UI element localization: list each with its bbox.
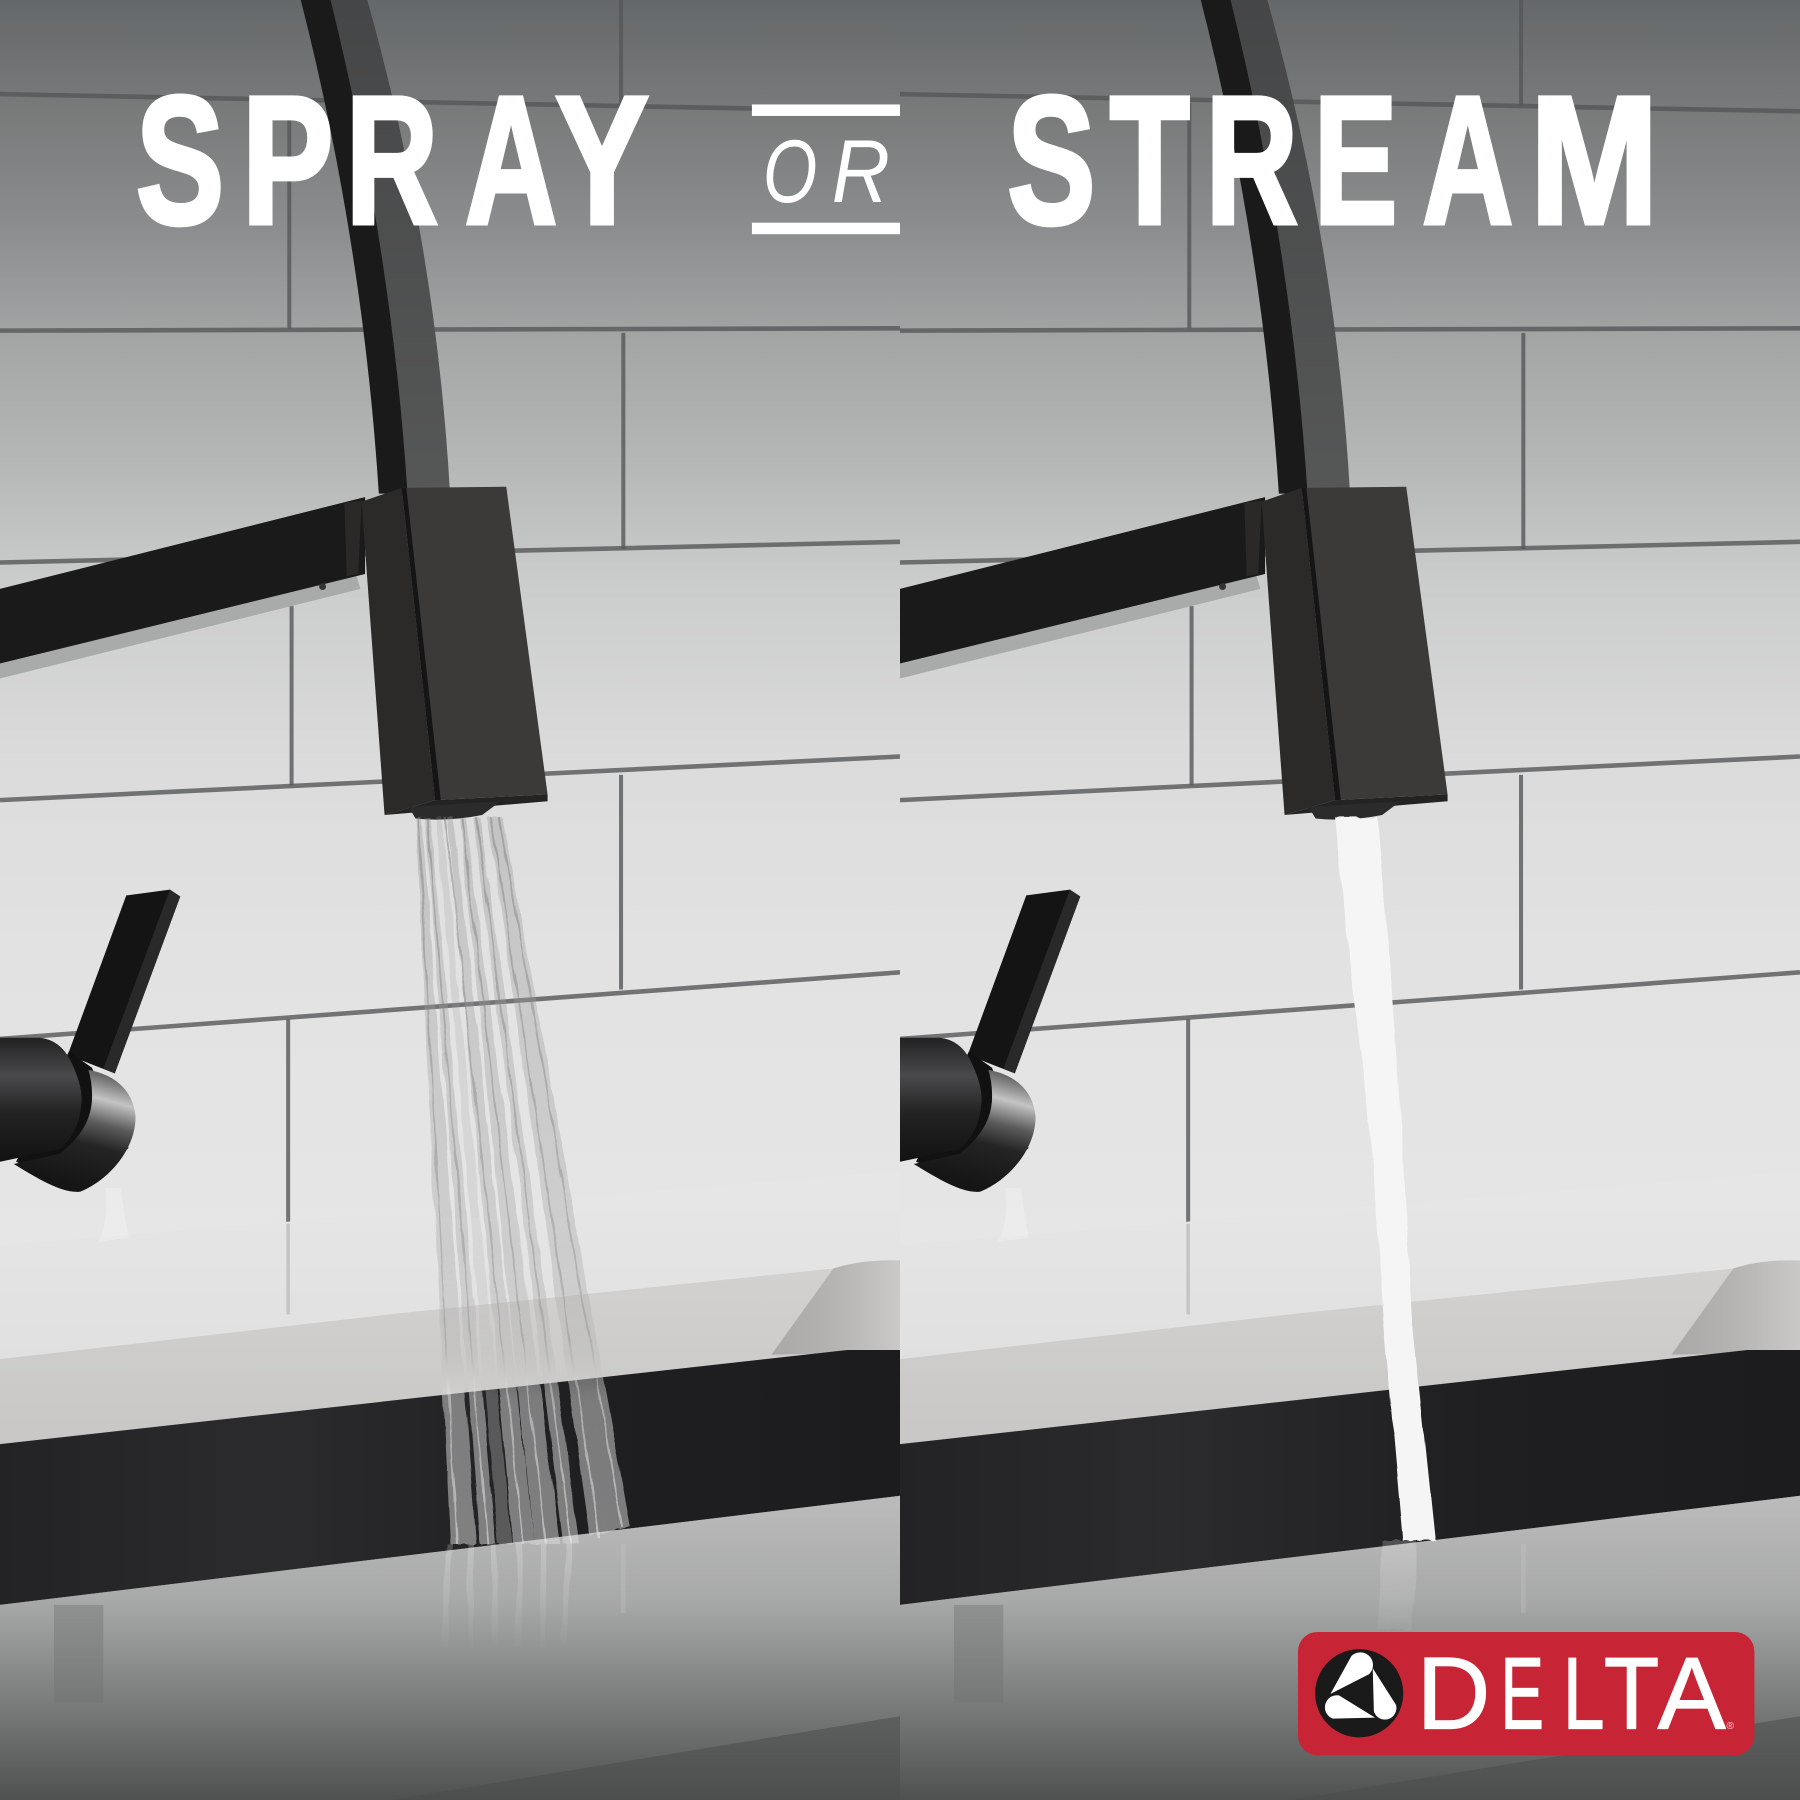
panel: stream photo (900, 0, 1800, 1800)
divider word: OR with rules: R (832, 121, 890, 221)
divider word: OR with rules: O (763, 121, 817, 221)
wordmark: L (1563, 1636, 1605, 1750)
title: STREAM: R (1206, 58, 1298, 262)
divider word: OR with rules (752, 104, 900, 234)
wordmark: A (1658, 1636, 1726, 1750)
faucet with pull-down spray head and handle (0, 0, 548, 1192)
wordmark: D (1417, 1636, 1490, 1750)
water: spray pattern (416, 817, 630, 1647)
logo: Delta (1298, 1632, 1754, 1755)
registered mark: ® (1727, 1721, 1735, 1732)
title: SPRAY: P (242, 58, 334, 262)
kitchen backsplash, counter and sink (900, 0, 1800, 1800)
kitchen backsplash, counter and sink (0, 0, 900, 1800)
title: STREAM: A (1422, 58, 1513, 262)
title: STREAM: T (1110, 58, 1190, 262)
wordmark: T (1604, 1636, 1659, 1750)
title: STREAM: E (1314, 58, 1397, 262)
panel: spray photo (0, 0, 900, 1800)
faucet with pull-down spray head and handle (900, 0, 1448, 1192)
title: SPRAY: Y (555, 58, 649, 262)
title: STREAM: M (1530, 58, 1659, 262)
title: SPRAY: A (465, 58, 557, 262)
title: SPRAY: S (136, 58, 224, 262)
wordmark: E (1500, 1636, 1544, 1750)
title: SPRAY: R (346, 58, 438, 262)
title: STREAM: S (1007, 58, 1095, 262)
icon: Delta triangle emblem (1315, 1649, 1403, 1737)
water: solid stream (1335, 817, 1435, 1630)
